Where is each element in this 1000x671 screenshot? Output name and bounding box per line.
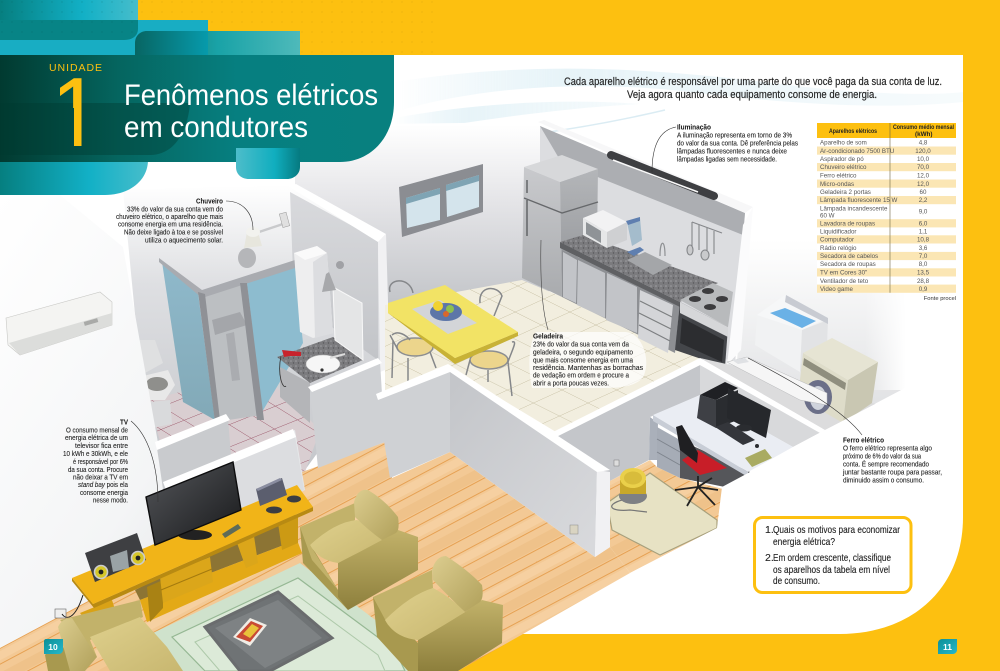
callout: TV: televisor fica entre xyxy=(75,441,128,450)
office floor xyxy=(608,460,727,573)
page number 10 xyxy=(44,639,63,654)
table: consumo de aparelhos: (kWh) xyxy=(915,131,932,138)
intro text xyxy=(564,76,942,101)
table: consumo de aparelhos: 10,0 xyxy=(917,156,930,163)
page number 11 xyxy=(938,639,957,654)
remote control xyxy=(222,524,241,538)
left wall xyxy=(0,195,305,648)
wall behind TV xyxy=(163,429,304,555)
office rug xyxy=(607,473,717,555)
washing machine xyxy=(755,295,828,372)
table: consumo de aparelhos: Ventilador de teto xyxy=(820,278,869,285)
fluorescent lamp xyxy=(611,155,714,196)
title xyxy=(124,79,378,144)
callout: Ferro elétrico xyxy=(748,358,942,484)
wood floor living room xyxy=(0,442,630,671)
table: consumo de aparelhos: Chuveiro elétrico xyxy=(820,164,867,171)
table: consumo de aparelhos: Computador xyxy=(820,236,854,244)
air conditioner xyxy=(6,292,112,355)
callout: Ferro elétrico: diminuido assim o consumo. xyxy=(843,476,924,484)
low bathroom wall xyxy=(155,414,233,510)
table body xyxy=(817,123,956,293)
table: consumo de aparelhos: 0,9 xyxy=(919,286,928,293)
red office chair xyxy=(675,425,727,506)
page number 10: 10 xyxy=(48,642,58,652)
power outlet and cord xyxy=(55,595,83,618)
main block xyxy=(0,55,394,162)
kitchen and dining back wall xyxy=(295,122,560,310)
stove xyxy=(675,283,733,367)
unit number: 1 xyxy=(48,57,103,167)
armchair upper xyxy=(300,490,418,610)
table: consumo de aparelhos: Aparelho de som xyxy=(820,140,867,146)
hanging utensils xyxy=(687,222,722,260)
light blue swooshes xyxy=(370,69,963,147)
callout: TV: não deixar a TV em xyxy=(73,472,128,482)
callout: Chuveiro: consome energia em uma residência. xyxy=(118,220,223,228)
laundry floor xyxy=(700,358,880,430)
white cut area xyxy=(630,388,906,573)
dining chairs xyxy=(390,281,515,396)
callout: TV: energia elétrica de um xyxy=(65,433,128,442)
table: consumo de aparelhos: Aspirador de pó xyxy=(820,156,864,163)
table: consumo de aparelhos: Fonte procel xyxy=(924,296,956,302)
table: consumo de aparelhos: Lâmpada fluorescente 15 W xyxy=(820,197,898,204)
title: em condutores xyxy=(124,111,308,144)
vacuum cleaner xyxy=(612,460,647,512)
questions box: os aparelhos da tabela em nível xyxy=(773,564,890,576)
callout: TV xyxy=(63,418,158,504)
refrigerator xyxy=(522,155,598,297)
callout: Iluminação: lâmpadas fluorescentes e nunca deixe xyxy=(677,146,787,156)
office back walls xyxy=(553,358,825,482)
stereo xyxy=(85,533,146,582)
questions box: Em ordem crescente, classifique xyxy=(773,552,891,564)
band second xyxy=(0,20,208,55)
kitchen floor tiles xyxy=(385,280,735,432)
table: consumo de aparelhos: 120,0 xyxy=(915,148,931,155)
desk xyxy=(649,395,793,478)
coffee table xyxy=(205,592,332,671)
table: consumo de aparelhos: 1,1 xyxy=(919,228,928,236)
shower head xyxy=(238,212,290,268)
microwave xyxy=(583,210,627,248)
bathroom mirror and cabinet xyxy=(294,246,363,360)
table: consumo de aparelhos: Geladeira 2 portas xyxy=(820,189,871,196)
computer xyxy=(697,382,772,467)
bathroom back wall xyxy=(123,185,385,470)
questions box: de consumo. xyxy=(773,575,820,587)
yellow dotted texture xyxy=(138,0,438,55)
table: consumo de aparelhos: 3,6 xyxy=(919,245,928,252)
table: consumo de aparelhos: TV em Cores 30" xyxy=(820,270,867,276)
dining partition wall xyxy=(376,364,610,557)
callout: Iluminação xyxy=(652,122,798,172)
TV stand xyxy=(72,485,313,632)
callout: TV: da sua conta. Procure xyxy=(68,465,128,474)
table: consumo de aparelhos: Lavadora de roupas xyxy=(820,220,875,228)
questions box: energia elétrica? xyxy=(773,536,835,548)
window xyxy=(399,164,483,237)
teal header block xyxy=(0,0,394,195)
kitchen right wall xyxy=(538,120,753,365)
callout: TV: stand bay pois ela xyxy=(78,480,129,489)
table: consumo de aparelhos: Secadora de roupas xyxy=(820,261,876,268)
bathroom counter and sink xyxy=(277,337,363,423)
callout: TV: nesse modo. xyxy=(93,496,128,504)
table: consumo de aparelhos: 60 xyxy=(920,189,927,196)
callout: Geladeira: que mais consome energia em uma xyxy=(533,356,634,364)
table: consumo de aparelhos: Lâmpada incandescente xyxy=(820,206,888,212)
questions box: Quais os motivos para economizar xyxy=(773,524,900,536)
callout: Chuveiro: Não deixe ligado à toa e se possível xyxy=(124,228,223,236)
shower box glass xyxy=(159,258,303,422)
bathroom side wall xyxy=(288,184,390,372)
table: consumo de aparelhos: Consumo médio mensal xyxy=(893,124,954,131)
sofa left xyxy=(45,600,183,671)
table: consumo de aparelhos: 28,8 xyxy=(917,278,930,285)
callout: Iluminação: A iluminação representa em torno de 3% xyxy=(677,130,792,140)
callout: Iluminação: Iluminação xyxy=(677,122,711,132)
callout: TV: consome energia xyxy=(80,488,129,497)
band third xyxy=(135,31,300,76)
callout: Chuveiro: utiliza o aquecimento solar. xyxy=(145,236,223,244)
dining table xyxy=(388,285,518,364)
illustration: house cutaway xyxy=(0,120,906,671)
callout: TV: 10 kWh e 30kWh, e ele xyxy=(63,449,128,458)
table: consumo de aparelhos: 12,0 xyxy=(917,172,930,180)
table: consumo de aparelhos: Micro-ondas xyxy=(820,181,854,188)
table: consumo de aparelhos: 9,0 xyxy=(919,208,928,216)
table striped rows xyxy=(817,146,956,293)
callout: Ferro elétrico: próximo de 6% do valor da sua xyxy=(843,452,922,460)
callout: Geladeira: residência. Mantenhas as borrachas xyxy=(533,363,643,372)
kitchen wall end post xyxy=(727,207,753,365)
table: consumo de aparelhos: 10,8 xyxy=(917,236,930,244)
toilet xyxy=(138,340,175,428)
questions box xyxy=(754,518,911,592)
callout: Ferro elétrico: juntar bastante roupa para passar, xyxy=(842,468,942,476)
table: consumo de aparelhos: 4,8 xyxy=(919,140,928,146)
callout: Chuveiro: chuveiro elétrico, o aparelho que mais xyxy=(116,212,223,221)
callout: Chuveiro xyxy=(116,196,253,244)
sink xyxy=(627,243,672,275)
questions box: 1. xyxy=(765,524,774,536)
table: consumo de aparelhos xyxy=(817,123,956,302)
callout: Ferro elétrico: Ferro elétrico xyxy=(843,436,884,444)
callout: Geladeira: abrir a porta poucas vezes. xyxy=(533,378,609,388)
game console and controllers xyxy=(256,478,301,514)
blender xyxy=(626,217,644,256)
band top xyxy=(0,0,138,20)
table: consumo de aparelhos: Video game xyxy=(820,286,853,293)
table: consumo de aparelhos: 70,0 xyxy=(917,164,930,171)
band small xyxy=(236,148,300,179)
table header xyxy=(817,123,956,138)
callout: Geladeira: Geladeira xyxy=(533,332,564,340)
ironing board xyxy=(727,357,827,405)
laundry wall xyxy=(700,207,906,430)
callout: Iluminação: lâmpadas ligadas sem necessidade. xyxy=(677,154,777,164)
callout: Geladeira: de vedação em ordem e procure a xyxy=(533,370,630,380)
table: consumo de aparelhos: 60 W xyxy=(820,212,835,220)
title: Fenômenos elétricos xyxy=(124,79,378,112)
kitchen counter xyxy=(560,235,718,307)
callout: Chuveiro: Chuveiro xyxy=(196,196,223,206)
callout: Geladeira: geladeira, o segundo equipamento xyxy=(533,348,633,356)
table: consumo de aparelhos: 7,0 xyxy=(919,253,928,260)
callout: Chuveiro: 33% do valor da sua conta vem do xyxy=(127,204,223,214)
table: consumo de aparelhos: Rádio relógio xyxy=(820,245,857,252)
intro text: Cada aparelho elétrico é responsável por uma parte do que você paga da sua conta de luz. xyxy=(564,76,942,88)
questions box: 2. xyxy=(765,552,774,564)
callout: Geladeira: 23% do valor da sua conta vem da xyxy=(533,340,630,348)
under desk shadow xyxy=(680,440,750,487)
callout: TV: O consumo mensal de xyxy=(66,426,128,434)
table: consumo de aparelhos: 2,2 xyxy=(919,197,928,204)
table: consumo de aparelhos: Liquidificador xyxy=(820,228,856,236)
page number 11: 11 xyxy=(943,642,952,652)
table: consumo de aparelhos: Ar-condicionado 7500 BTU xyxy=(820,148,894,155)
callout: Ferro elétrico: O ferro elétrico representa algo xyxy=(843,444,932,452)
dryer xyxy=(798,338,878,423)
table: consumo de aparelhos: 6,0 xyxy=(919,220,928,228)
fruit bowl xyxy=(430,301,462,321)
television xyxy=(146,462,241,545)
callout: Geladeira xyxy=(529,240,646,388)
table: consumo de aparelhos: Ferro elétrico xyxy=(820,172,857,180)
table: consumo de aparelhos: 13,5 xyxy=(917,270,930,276)
callout: Ferro elétrico: conta. É sempre recomendado xyxy=(843,460,929,468)
bathroom front wall xyxy=(308,358,385,468)
kitchen base cabinets xyxy=(562,250,680,353)
callout: Iluminação: do valor da sua conta. Dê preferência pelas xyxy=(677,138,798,148)
armchair lower xyxy=(373,556,503,671)
dark overlay xyxy=(0,103,190,155)
green rug xyxy=(153,563,430,671)
unit label: UNIDADE xyxy=(49,62,102,74)
table: consumo de aparelhos: Aparelhos elétricos xyxy=(829,128,877,135)
bathroom floor tiles xyxy=(148,372,320,482)
table: consumo de aparelhos: Secadora de cabelos xyxy=(820,253,878,260)
callout: TV: TV xyxy=(120,418,129,426)
table: consumo de aparelhos: 12,0 xyxy=(917,181,930,188)
band lower xyxy=(0,160,148,195)
callout: TV: é responsável por 6% xyxy=(73,457,128,466)
table: consumo de aparelhos: 8,0 xyxy=(919,261,928,268)
intro text: Veja agora quanto cada equipamento consome de energia. xyxy=(627,89,877,101)
